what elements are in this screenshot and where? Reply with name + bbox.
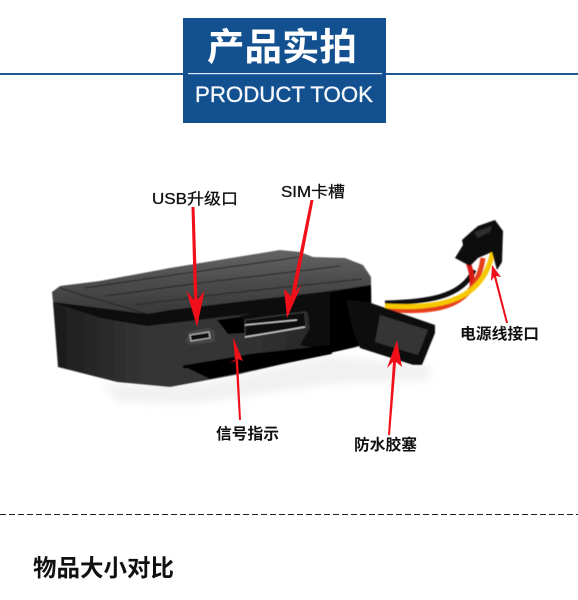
label: sim slot: SIM卡槽 [281, 183, 345, 201]
power connector [455, 220, 503, 270]
device front face [53, 280, 372, 387]
section divider [0, 514, 578, 516]
signal led notch [217, 314, 262, 334]
section heading: size comparison: 物品大小对比 [33, 555, 174, 581]
product photo: gps tracker device [52, 220, 503, 404]
arrow: power connector [491, 265, 508, 323]
black band under shell [53, 285, 371, 326]
shell ridges [60, 257, 362, 314]
arrow: waterproof plug [387, 340, 402, 435]
usb port [186, 328, 215, 345]
label: signal indicator: 信号指示 [216, 425, 279, 443]
lower slot [183, 345, 332, 379]
arrow: usb [186, 207, 204, 327]
label: power connector: 电源线接口 [460, 324, 539, 343]
arrow: signal indicator [230, 337, 243, 420]
label: waterproof plug: 防水胶塞 [354, 435, 417, 454]
right frame [330, 285, 371, 353]
wires [385, 250, 493, 311]
banner: product took [183, 18, 386, 123]
banner subtitle: PRODUCT TOOK [195, 82, 373, 107]
rubber plug [336, 300, 435, 365]
device top shell [52, 250, 371, 316]
label: usb port: USB升级口 [152, 190, 238, 208]
banner title: 产品实拍 [207, 26, 357, 68]
floor shadow [100, 356, 430, 404]
header rule [0, 73, 578, 75]
arrow: sim slot [284, 200, 314, 318]
sim slot surround [240, 296, 333, 352]
